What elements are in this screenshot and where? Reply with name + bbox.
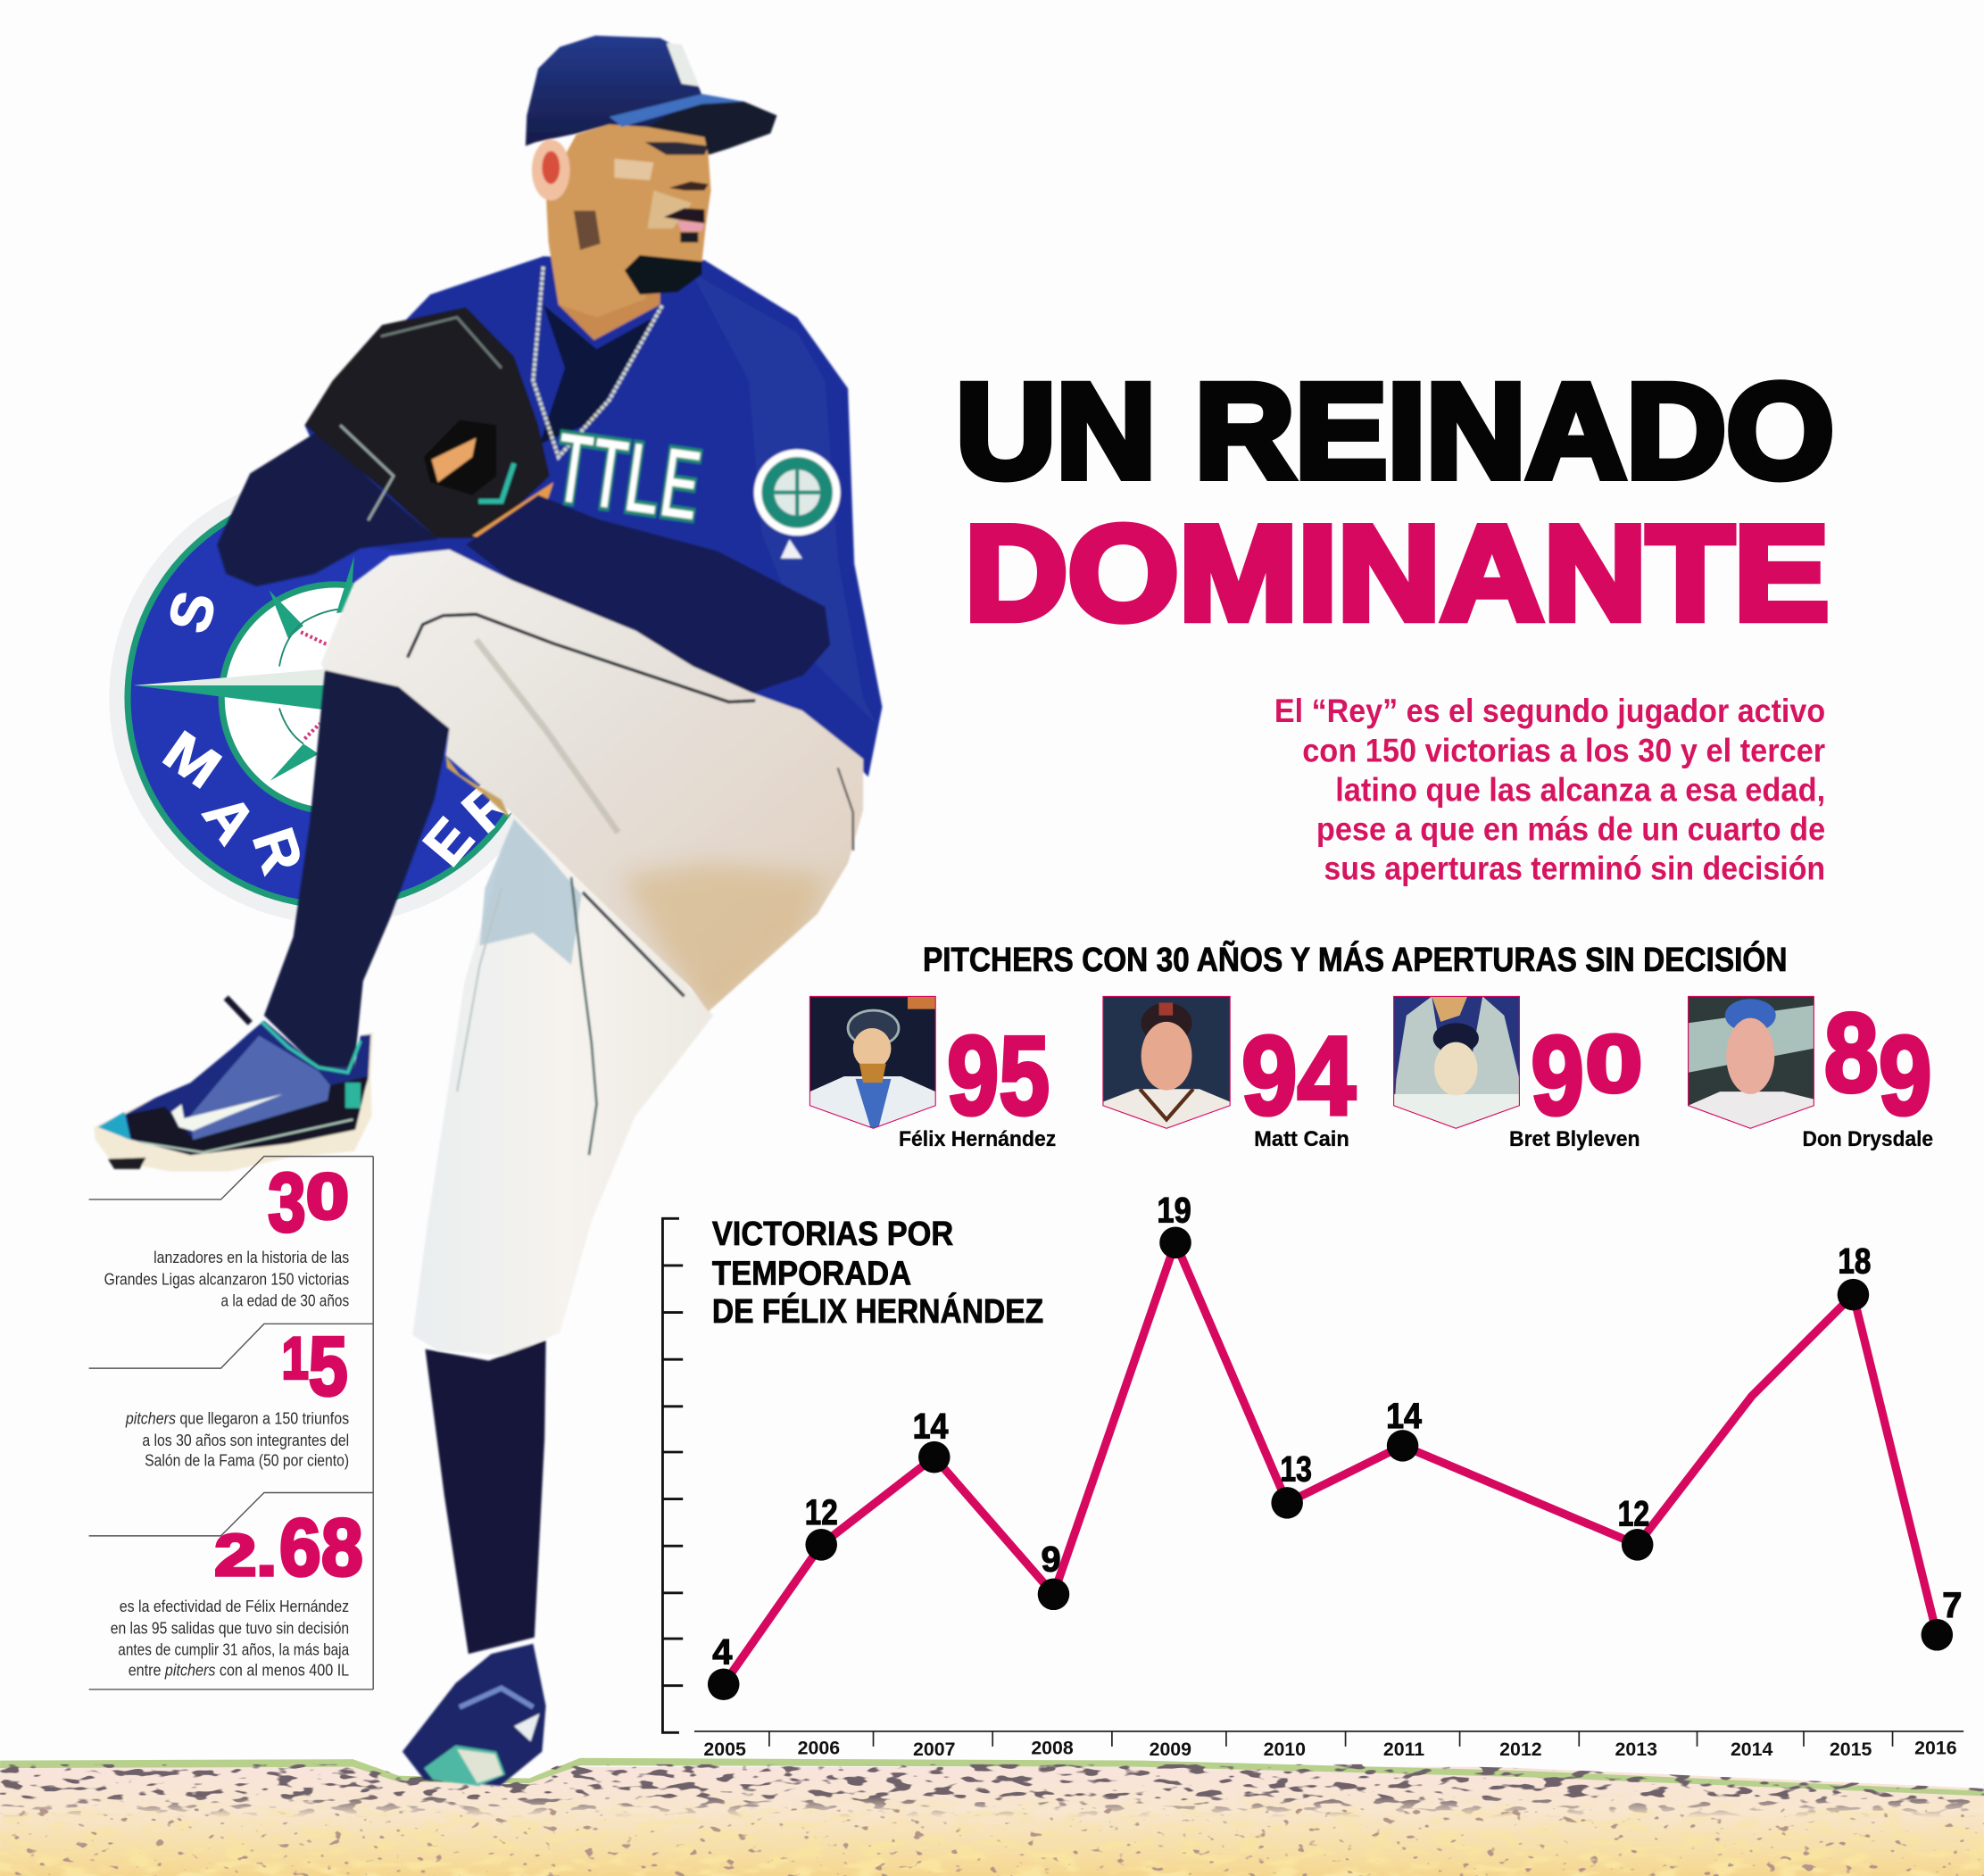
panel: stat 30 <box>89 1156 373 1689</box>
value 94: 9 <box>1241 1014 1298 1139</box>
value 2.68: . <box>256 1523 277 1588</box>
year labels: 2012 <box>1499 1739 1542 1760</box>
raised shoe <box>94 998 373 1172</box>
intro text: El “Rey” es el segundo jugador activo <box>1274 693 1825 729</box>
standing sock <box>425 1341 546 1654</box>
value 89: 8 <box>1824 991 1879 1116</box>
value labels: 12 <box>805 1493 838 1532</box>
year labels: 2014 <box>1731 1739 1773 1760</box>
panel: stat 15 <box>89 1319 373 1470</box>
chart title <box>712 1215 1043 1331</box>
logo letters: E <box>411 806 486 877</box>
title <box>956 356 1834 648</box>
chart title: VICTORIAS POR <box>712 1215 953 1253</box>
value labels: 14 <box>913 1407 948 1446</box>
description: entre pitchers con al menos 400 IL <box>129 1660 349 1679</box>
value 15: 1 <box>282 1326 309 1391</box>
year labels: 2008 <box>1031 1737 1074 1758</box>
compass star <box>133 668 328 685</box>
panel: Félix Hernández 95 <box>809 996 1056 1151</box>
year labels: 2015 <box>1830 1739 1872 1760</box>
description: en las 95 salidas que tuvo sin decisión <box>111 1618 349 1637</box>
neck <box>548 241 660 340</box>
year labels <box>703 1737 1957 1760</box>
value labels: 9 <box>1042 1540 1061 1580</box>
logo letters: R <box>450 768 525 844</box>
chart title: TEMPORADA <box>712 1254 911 1292</box>
logo letters: M <box>153 718 232 801</box>
sleeve patch <box>754 449 841 535</box>
value 2.68: 6 <box>279 1503 321 1593</box>
value 15: 5 <box>309 1319 348 1413</box>
year labels: 2006 <box>798 1737 840 1758</box>
description: a los 30 años son integrantes del <box>142 1431 349 1449</box>
logo letters: S <box>155 585 228 639</box>
ear <box>532 139 570 201</box>
standing leg pants <box>412 815 713 1356</box>
value labels: 4 <box>712 1632 732 1672</box>
chain <box>533 267 662 457</box>
x axis <box>694 1731 1963 1747</box>
intro text: sus aperturas terminó sin decisión <box>1324 851 1825 887</box>
value labels <box>712 1191 1962 1672</box>
description: a la edad de 30 años <box>221 1291 349 1309</box>
year labels: 2009 <box>1150 1739 1191 1760</box>
chart title: DE FÉLIX HERNÁNDEZ <box>712 1291 1043 1331</box>
intro text: con 150 victorias a los 30 y el tercer <box>1302 732 1825 768</box>
value labels: 14 <box>1386 1397 1422 1436</box>
panel: Don Drysdale 89 <box>1689 991 1933 1151</box>
value 95: 9 <box>947 1014 999 1139</box>
hand <box>472 482 553 547</box>
year labels: 2016 <box>1914 1737 1957 1758</box>
portrait: Matt Cain <box>1103 996 1230 1128</box>
year labels: 2007 <box>913 1739 956 1760</box>
value 95: 5 <box>999 1014 1050 1139</box>
value 2.68: 8 <box>321 1503 363 1593</box>
portrait: Félix Hernández <box>809 996 937 1128</box>
portrait: Bret Blyleven <box>1394 996 1521 1130</box>
value 94 <box>1241 1014 1356 1139</box>
ground: pitcher's mound dirt <box>0 1752 1984 1876</box>
logo letters <box>153 585 525 881</box>
forearm sleeve <box>466 495 830 693</box>
value 15 <box>282 1319 348 1413</box>
year labels: 2005 <box>703 1739 746 1760</box>
description: antes de cumplir 31 años, la más baja <box>118 1640 350 1659</box>
intro text <box>1274 693 1825 887</box>
raised sock <box>264 670 450 1067</box>
logo letters: R <box>240 820 315 881</box>
data line <box>724 1242 1937 1684</box>
name: Matt Cain <box>1254 1127 1349 1151</box>
value 90: 0 <box>1585 1019 1642 1109</box>
heading: pitchers table: PITCHERS CON 30 AÑOS Y MÁS APERTURAS SIN DECISIÓN <box>923 940 1788 979</box>
description <box>125 1409 349 1470</box>
year labels: 2011 <box>1383 1739 1424 1760</box>
name: Félix Hernández <box>899 1127 1056 1151</box>
panel: Bret Blyleven 90 <box>1394 996 1642 1151</box>
description: es la efectividad de Félix Hernández <box>120 1597 349 1615</box>
maker logo <box>781 539 802 559</box>
logo: Seattle Mariners <box>109 472 561 924</box>
dark undershirt collar <box>539 304 653 444</box>
value 30: 0 <box>306 1160 349 1233</box>
face <box>546 124 710 318</box>
intro text: latino que las alcanza a esa edad, <box>1335 771 1825 808</box>
name: Bret Blyleven <box>1509 1127 1640 1151</box>
description: Salón de la Fama (50 por ciento) <box>145 1451 349 1470</box>
value 2.68 <box>214 1503 363 1593</box>
value 89 <box>1824 991 1932 1139</box>
value 30 <box>268 1156 349 1249</box>
value 94: 4 <box>1298 1014 1356 1139</box>
value labels: 19 <box>1157 1191 1191 1231</box>
value 90: 9 <box>1531 1014 1584 1139</box>
jersey lettering: TTLE <box>548 409 708 544</box>
value labels: 7 <box>1942 1586 1962 1625</box>
description: Grandes Ligas alcanzaron 150 victorias <box>104 1269 349 1288</box>
tattoo <box>553 252 589 277</box>
title: UN REINADO <box>956 356 1834 506</box>
logo letters: A <box>191 783 269 855</box>
panel: stat 2.68 <box>89 1492 373 1689</box>
year labels: 2013 <box>1615 1739 1657 1760</box>
description: pitchers que llegaron a 150 triunfos <box>125 1409 349 1428</box>
value 2.68: 2 <box>214 1523 256 1588</box>
description: lanzadores en la historia de las <box>154 1248 349 1266</box>
y axis <box>662 1218 683 1732</box>
intro text: pese a que en más de un cuarto de <box>1316 810 1825 847</box>
value 90 <box>1531 1014 1642 1139</box>
line chart: victorias por temporada <box>662 1191 1963 1760</box>
raised arm sleeve <box>217 432 438 586</box>
raised thigh pants <box>321 550 863 1016</box>
value 95 <box>947 1014 1050 1139</box>
year labels: 2010 <box>1264 1739 1306 1760</box>
portrait: Don Drysdale <box>1689 996 1815 1128</box>
player: Félix Hernández pitching <box>94 36 882 1786</box>
name: Don Drysdale <box>1803 1127 1933 1151</box>
value labels: 13 <box>1280 1450 1312 1490</box>
cap <box>526 36 776 155</box>
jersey body <box>304 256 882 776</box>
value 30: 3 <box>268 1156 306 1249</box>
description <box>111 1597 350 1679</box>
value 89: 9 <box>1879 1014 1932 1139</box>
data points <box>708 1227 1953 1700</box>
panel: Matt Cain 94 <box>1103 996 1356 1151</box>
description <box>104 1248 349 1309</box>
value labels: 18 <box>1838 1241 1871 1281</box>
white cut-out above the mound <box>0 1752 1984 1789</box>
title: DOMINANTE <box>965 498 1829 648</box>
value labels: 12 <box>1618 1494 1649 1533</box>
standing shoe <box>403 1644 546 1786</box>
glove <box>304 307 550 538</box>
